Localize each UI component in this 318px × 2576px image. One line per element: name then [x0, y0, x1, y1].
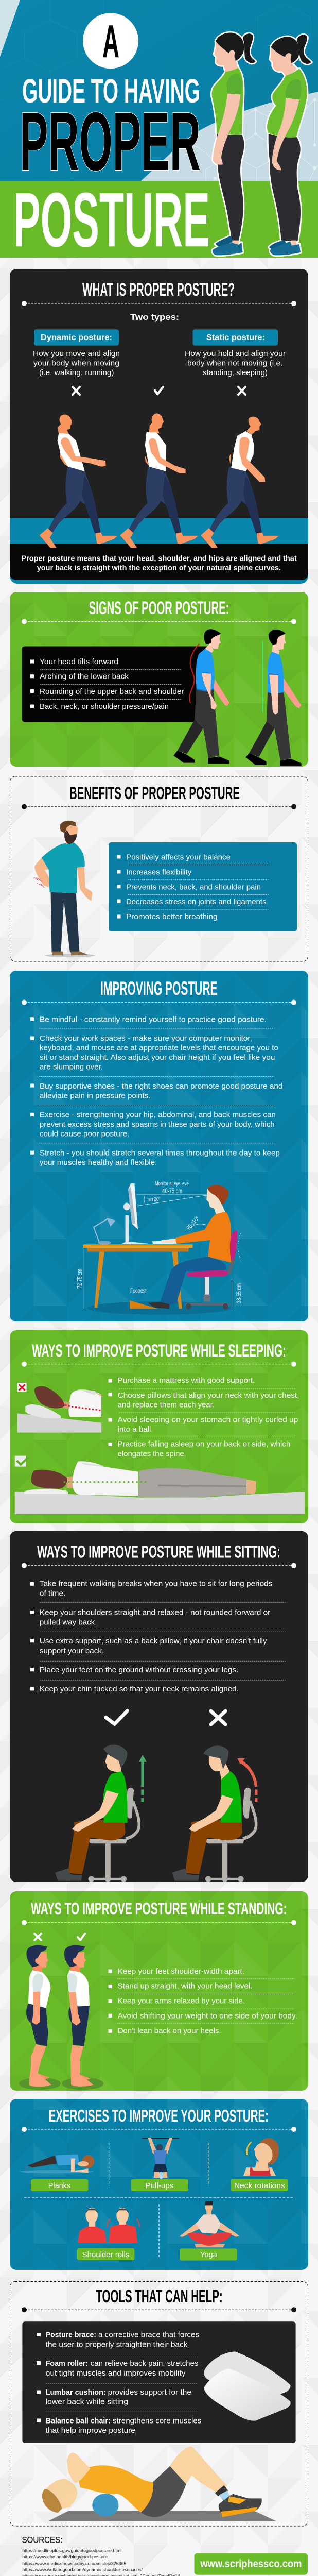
list: sleeping tips — [108, 1377, 299, 1458]
website button: www.scriphessco.com — [200, 2558, 302, 2570]
illustration: lumbar cushions — [204, 2351, 291, 2421]
illustration: woman with poor posture — [267, 35, 311, 255]
list: tools: out tight muscles and improves mobility — [46, 2369, 186, 2378]
icon: cross — [211, 1711, 225, 1724]
list: sitting tips: pulled way back. — [40, 1619, 97, 1627]
list: standing tips: Keep your arms relaxed by your side. — [118, 1997, 245, 2006]
text: two types: Two types: — [130, 312, 179, 322]
exercise: planks — [20, 2155, 94, 2191]
list: benefits — [109, 842, 297, 931]
list: tools: strengthens core muscles — [113, 2417, 201, 2425]
text: static description: body when not moving (i.e. — [187, 360, 283, 368]
list: tools: Balance ball chair: — [46, 2416, 111, 2425]
list: standing tips: Avoid shifting your weight to one side of your body. — [118, 2012, 297, 2020]
list: tools: lower back while sitting — [46, 2398, 128, 2406]
illustration: good standing posture — [62, 1945, 103, 2090]
illustration: ergonomic desk setup: Monitor at eye level — [155, 1180, 189, 1187]
illustration: bad sleeping posture — [17, 1383, 101, 1433]
list: sleeping tips: elongates the spine. — [118, 1450, 186, 1458]
exercise: pull-ups: Pull-ups — [146, 2182, 173, 2190]
text: dynamic description: (i.e. walking, running) — [39, 369, 114, 377]
exercise: planks: Planks — [48, 2182, 70, 2190]
label: static posture — [192, 329, 278, 346]
list: tools: Lumbar cushion: — [46, 2388, 106, 2397]
illustration: man with good posture — [245, 630, 302, 766]
icon: check — [106, 1711, 127, 1724]
list: improving posture tips: could cause poor posture. — [40, 1130, 129, 1139]
list: benefits: Promotes better breathing — [126, 913, 217, 921]
list: improving posture tips: keyboard, and mouse are at appropriate levels that encourage you to — [40, 1044, 278, 1052]
illustration: poor standing posture — [19, 1945, 61, 2090]
list: sitting tips: Keep your shoulders straight and relaxed - not rounded forward or — [40, 1609, 270, 1617]
illustration: woman with proper posture — [212, 33, 256, 255]
list: sleeping tips: Avoid sleeping on your stomach or tightly curled up — [118, 1416, 298, 1424]
list: improving posture tips: sit or stand straight. Also adjust your chair height if you feel like you — [40, 1054, 275, 1062]
illustration: ergonomic desk setup: 40-75 cm — [162, 1187, 182, 1195]
list: standing tips: Don't lean back on your heels. — [118, 2027, 221, 2035]
label: dynamic posture — [34, 329, 119, 346]
exercise: yoga — [180, 2201, 239, 2261]
list: sitting tips: support your back. — [40, 1647, 104, 1655]
icon: cross — [73, 387, 80, 395]
panel: ways to improve posture while standing — [10, 1891, 308, 2091]
icon: check — [155, 387, 163, 394]
list: benefits: Prevents neck, back, and shoulder pain — [126, 883, 261, 891]
list: improving posture tips: your muscles healthy and flexible. — [40, 1159, 157, 1167]
illustration: person on foam roller — [42, 2446, 276, 2521]
list: standing tips — [108, 1968, 297, 2035]
list: benefits: Positively affects your balance — [126, 854, 231, 862]
title badge: A: A — [102, 16, 119, 68]
title line: guide to having: GUIDE TO HAVING — [22, 72, 200, 110]
list: sleeping tips: and replace them each year. — [118, 1401, 215, 1410]
list: benefits: Increases flexibility — [126, 868, 192, 876]
text: static description: standing, sleeping) — [203, 369, 268, 377]
illustration: leaning back walker — [40, 415, 118, 548]
icon: cross — [238, 387, 245, 395]
panel: exercises to improve your posture — [10, 2099, 308, 2270]
list: improving posture tips: Check your work spaces - make sure your computer monitor, — [40, 1035, 252, 1043]
icon: check — [78, 1934, 85, 1940]
text: static description: How you hold and align your — [185, 350, 286, 358]
list: standing tips: Keep your feet shoulder-width apart. — [118, 1968, 244, 1976]
illustration: ergonomic desk setup — [76, 1180, 243, 1315]
list: tools: Posture brace: — [46, 2331, 96, 2340]
panel: ways to improve posture while sitting — [10, 1531, 308, 1882]
illustration: man with poor posture — [173, 629, 229, 764]
list: improving posture tips: Be mindful - constantly remind yourself to practice good posture. — [40, 1015, 267, 1024]
illustration: ergonomic desk setup: min 20º — [146, 1196, 160, 1202]
list: signs: Your head tilts forward — [40, 658, 118, 666]
list: signs: Arching of the lower back — [40, 673, 129, 681]
exercise: neck rotations: Neck rotations — [234, 2182, 285, 2190]
list: signs: Rounding of the upper back and shoulder — [40, 688, 184, 696]
list: improving posture tips: prevent excess stress and spasms in these parts of your body, which — [40, 1121, 275, 1129]
panel: signs of poor posture — [10, 592, 308, 767]
illustration: ergonomic desk setup: 38-55 cm — [235, 1283, 243, 1303]
list: tools: provides support for the — [108, 2388, 191, 2397]
list: tools: can relieve back pain, stretches — [91, 2360, 198, 2368]
heading: TOOLS THAT CAN HELP: — [96, 2286, 223, 2307]
list: tools: a corrective brace that forces — [98, 2331, 199, 2340]
exercise: pull-ups — [131, 2138, 188, 2191]
panel: ways to improve posture while sleeping — [10, 1330, 308, 1523]
label: static posture: Static posture: — [206, 333, 265, 342]
exercise: shoulder rolls: Shoulder rolls — [82, 2251, 129, 2259]
text: static description — [185, 350, 286, 377]
title badge: A — [83, 13, 138, 69]
list: improving posture tips: Stretch - you should stretch several times throughout the day to keep — [40, 1149, 280, 1157]
list: sleeping tips: Practice falling asleep on your back or side, which — [118, 1440, 290, 1449]
text: dynamic description — [33, 350, 120, 377]
website button — [195, 2553, 308, 2575]
hero header — [0, 0, 318, 263]
illustration: ergonomic desk setup: 90-110º — [185, 1215, 201, 1231]
list: improving posture tips: alleviate pain in pressure points. — [40, 1092, 150, 1100]
panel: benefits of proper posture — [10, 776, 308, 961]
list: sleeping tips: Purchase a mattress with good support. — [118, 1377, 255, 1385]
list: sitting tips: of time. — [40, 1589, 65, 1598]
list: improving posture tips: Buy supportive shoes - the right shoes can promote good posture and — [40, 1082, 282, 1091]
panel: improving posture — [10, 971, 308, 1321]
list: sleeping tips: into a ball. — [118, 1426, 153, 1434]
heading: IMPROVING POSTURE — [100, 978, 217, 999]
illustration: ergonomic desk setup: 72-75 cm — [76, 1269, 83, 1289]
panel: tools that can help — [10, 2281, 308, 2526]
sources: https://www.wellandgood.com/dynamic-shoulder-exercises/ — [22, 2567, 143, 2572]
illustration: incorrect sitting posture — [172, 1745, 258, 1882]
illustration: good sleeping posture — [15, 1456, 305, 1514]
list: sitting tips — [30, 1580, 286, 1693]
list: tools: Foam roller: — [46, 2359, 88, 2368]
exercise: yoga: Yoga — [200, 2251, 218, 2259]
exercise: shoulder rolls — [77, 2208, 139, 2260]
text: proper posture definition: your back is straight with the exception of your natural spine curves. — [37, 564, 281, 572]
list: sitting tips: Take frequent walking breaks when you have to sit for long periods — [40, 1580, 272, 1588]
illustration: man with back pain — [34, 821, 95, 957]
illustration: correct posture walker — [120, 414, 198, 548]
list: tools — [22, 2321, 296, 2443]
list: sleeping tips: Choose pillows that align your neck with your chest, — [118, 1392, 299, 1400]
list: improving posture tips: Exercise - strengthening your hip, abdominal, and back muscles can — [40, 1111, 276, 1119]
sources: https://www.medicalnewstoday.com/articles/325365 — [22, 2561, 127, 2566]
list: signs — [22, 646, 207, 722]
panel: what is proper posture — [10, 269, 308, 584]
illustration: correct sitting posture — [55, 1745, 147, 1882]
label: dynamic posture: Dynamic posture: — [41, 333, 112, 342]
text: dynamic description: How you move and align — [33, 350, 120, 358]
list: standing tips: Stand up straight, with your head level. — [118, 1982, 253, 1991]
list: tools: that help improve posture — [46, 2427, 135, 2435]
illustration: ergonomic desk setup: Footrest — [130, 1287, 147, 1294]
list: improving posture tips: are slumping over. — [40, 1063, 103, 1072]
list: tools: the user to properly straighten their back — [46, 2341, 188, 2349]
icon: cross — [34, 1934, 41, 1940]
sources: https://medlineplus.gov/guidetogoodposture.html — [22, 2548, 121, 2553]
sources — [22, 2535, 181, 2576]
illustration: leaning forward walker — [201, 417, 279, 548]
text: proper posture definition: Proper posture means that your head, shoulder, and hips are aligned and that — [21, 554, 297, 563]
sources: https://www.ehe.health/blog/good-posture — [22, 2554, 108, 2560]
exercise: neck rotations — [231, 2138, 288, 2191]
text: proper posture definition — [21, 554, 297, 572]
text: dynamic description: your body when moving — [33, 360, 119, 368]
list: benefits: Decreases stress on joints and ligaments — [126, 898, 267, 906]
sources: SOURCES: — [22, 2535, 62, 2545]
list: sitting tips: Keep your chin tucked so that your neck remains aligned. — [40, 1685, 239, 1693]
list: sitting tips: Place your feet on the ground without crossing your legs. — [40, 1666, 239, 1674]
list: improving posture tips — [30, 1015, 282, 1167]
list: signs: Back, neck, or shoulder pressure/pain — [40, 703, 169, 711]
list: sitting tips: Use extra support, such as a back pillow, if your chair doesn't fully — [40, 1637, 267, 1646]
